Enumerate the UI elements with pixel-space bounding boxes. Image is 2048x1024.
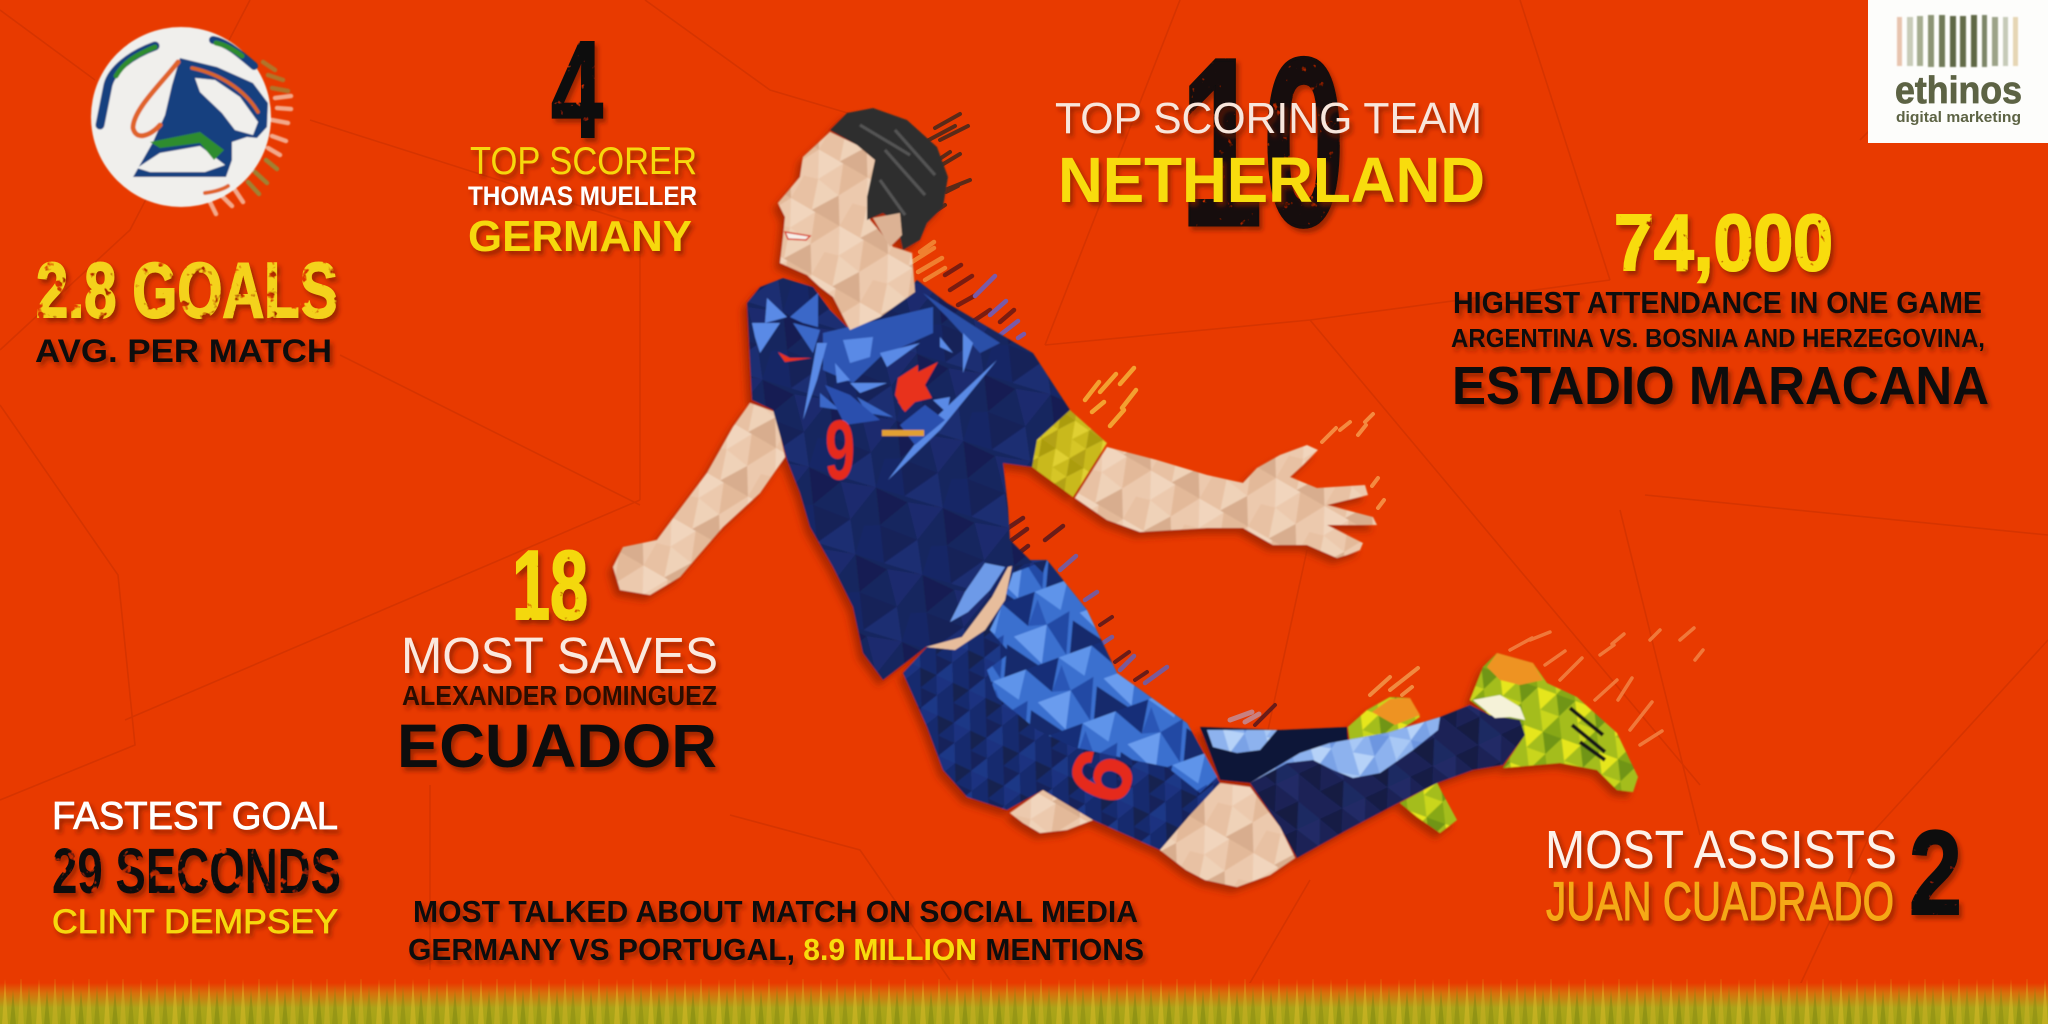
hair <box>830 108 948 250</box>
netherland: NETHERLAND <box>1058 144 1485 216</box>
motion streaks <box>912 114 1703 745</box>
juan cuadrado: JUAN CUADRADO <box>1546 870 1894 932</box>
top scorer label: TOP SCORER <box>470 140 697 183</box>
most saves label: MOST SAVES <box>401 627 718 684</box>
shorts number 9: 9 <box>1048 736 1155 816</box>
jersey number 9: 9 <box>825 403 855 497</box>
stat: fastest goal <box>52 795 341 941</box>
most assists label: MOST ASSISTS <box>1545 820 1897 880</box>
shorts <box>903 555 1225 850</box>
74,000: 74,000 <box>1614 198 1833 287</box>
ball panels <box>100 40 268 193</box>
stat: most talked about match <box>408 894 1144 967</box>
back leg sock <box>1200 727 1348 783</box>
left arm <box>613 403 785 595</box>
chest panel <box>823 307 933 383</box>
armband <box>1032 410 1107 497</box>
large knee <box>1160 783 1295 887</box>
number 10: 10 <box>1180 8 1345 276</box>
shorts light panel <box>980 555 1225 800</box>
ethinos wordmark: ethinos <box>1895 70 2022 112</box>
sock light panel <box>1250 717 1440 783</box>
number 4: 4 <box>551 13 603 167</box>
ear <box>873 213 902 247</box>
ecuador: ECUADOR <box>397 712 717 780</box>
ball splatter <box>210 62 291 214</box>
neck and face <box>778 132 915 330</box>
highest attendance label: HIGHEST ATTENDANCE IN ONE GAME <box>1453 285 1982 320</box>
stat: average goals <box>35 246 338 369</box>
stat: most saves <box>397 530 718 780</box>
stat: top scoring team <box>1055 8 1485 276</box>
belly skin <box>926 566 1012 650</box>
29 seconds: 29 SECONDS <box>52 835 341 907</box>
stat: highest attendance <box>1451 198 1989 416</box>
fastest goal label: FASTEST GOAL <box>52 795 338 838</box>
stadium: ESTADIO MARACANA <box>1452 356 1989 416</box>
mentions line: GERMANY VS PORTUGAL, 8.9 MILLION MENTIONS <box>408 932 1144 967</box>
stat: most assists <box>1545 806 1962 940</box>
logo bars <box>1897 15 2018 67</box>
nike swoosh <box>778 352 812 362</box>
crest <box>895 362 938 412</box>
stat: top scorer <box>468 13 697 261</box>
gold bar <box>882 430 924 436</box>
number 18: 18 <box>512 530 588 640</box>
jersey triangles <box>752 293 997 480</box>
front shoe <box>1470 653 1638 792</box>
thomas mueller: THOMAS MUELLER <box>468 181 697 211</box>
social media line: MOST TALKED ABOUT MATCH ON SOCIAL MEDIA <box>413 894 1138 929</box>
number 2: 2 <box>1909 806 1962 940</box>
jersey side panel near waist <box>950 563 1005 622</box>
clint dempsey: CLINT DEMPSEY <box>52 903 338 941</box>
ball body <box>91 27 271 207</box>
back shoe <box>1348 697 1457 833</box>
match name: ARGENTINA VS. BOSNIA AND HERZEGOVINA, <box>1451 323 1985 353</box>
top scoring team label: TOP SCORING TEAM <box>1055 94 1482 143</box>
jersey <box>747 278 1070 680</box>
digital marketing: digital marketing <box>1896 109 2021 126</box>
2.8 goals: 2.8 GOALS <box>36 246 338 334</box>
germany: GERMANY <box>468 212 692 261</box>
shoe stripes <box>1570 708 1605 760</box>
figure with shadow <box>613 108 1638 887</box>
front leg sock <box>1250 705 1525 858</box>
hair highlights <box>860 125 935 215</box>
logo <box>1868 0 2048 143</box>
avg per match: AVG. PER MATCH <box>35 333 332 369</box>
logo box <box>1868 0 2048 143</box>
alexander dominguez: ALEXANDER DOMINGUEZ <box>402 680 717 711</box>
soccer ball <box>91 27 291 214</box>
right arm <box>1075 445 1377 558</box>
grass strip <box>0 979 2048 1024</box>
mouth <box>785 232 810 240</box>
knee under shorts <box>1010 790 1093 833</box>
player illustration <box>613 108 1703 887</box>
